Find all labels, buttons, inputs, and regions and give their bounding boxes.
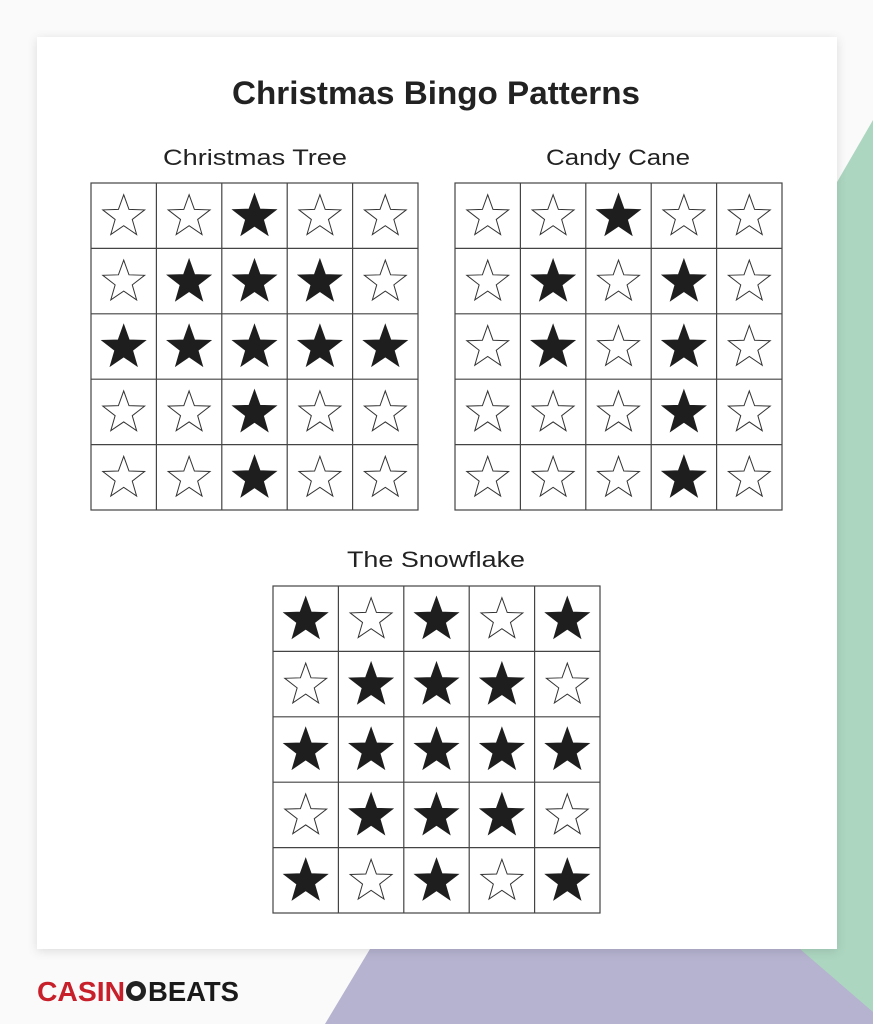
grid: The Snowflake	[273, 586, 600, 913]
logo: CASINOBEATS: CASIN	[37, 976, 125, 1007]
heading: Candy Cane: Candy Cane	[546, 145, 690, 170]
title: Christmas Bingo Patterns	[232, 75, 640, 111]
logo: CASINOBEATS: BEATS	[148, 976, 239, 1007]
background shape: purple	[325, 949, 873, 1024]
background shape: green	[560, 120, 873, 1024]
grid: Candy Cane	[455, 183, 782, 510]
heading: Christmas Tree: Christmas Tree	[163, 145, 347, 170]
heading: The Snowflake: The Snowflake	[347, 547, 525, 572]
grid: Christmas Tree	[91, 183, 418, 510]
logo: CASINOBEATS	[37, 976, 239, 1007]
